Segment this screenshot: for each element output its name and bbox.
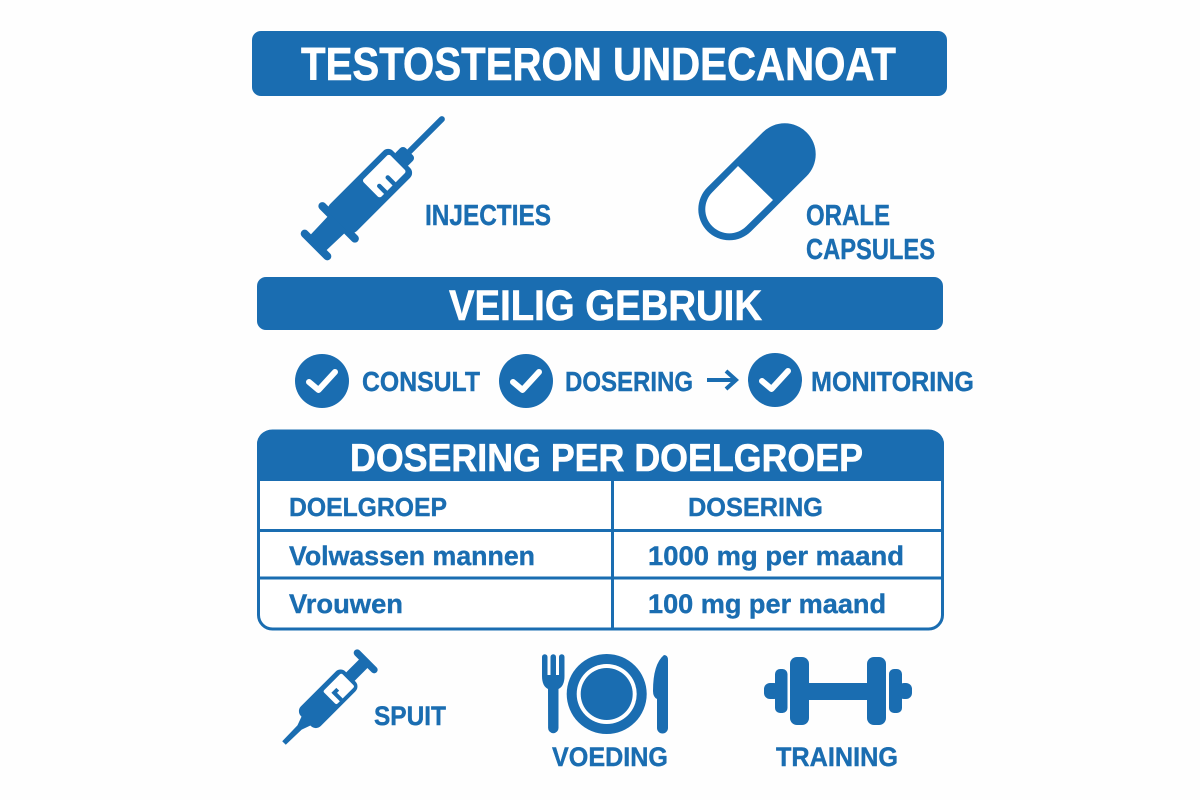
table header: DOSERING PER DOELGROEP	[350, 437, 863, 480]
label: training: TRAINING	[776, 742, 898, 772]
section banner: veilig gebruik: VEILIG GEBRUIK	[449, 282, 762, 330]
step: consult: CONSULT	[362, 366, 480, 397]
plate	[567, 654, 647, 734]
step: consult	[295, 354, 480, 408]
column headers: DOSERING	[688, 492, 823, 522]
dosage table	[257, 430, 944, 629]
section banner: veilig gebruik	[257, 277, 943, 330]
knife	[653, 655, 668, 734]
label: spuit: SPUIT	[374, 701, 446, 731]
icon: capsule	[705, 154, 785, 233]
label: orale capsules: CAPSULES	[806, 234, 935, 266]
row: vrouwen: 100 mg per maand	[648, 589, 886, 619]
label: voeding: VOEDING	[552, 742, 668, 772]
label: orale capsules: ORALE	[806, 200, 890, 232]
row: vrouwen: Vrouwen	[289, 589, 403, 619]
column headers: DOELGROEP	[289, 492, 447, 522]
icon: fork, plate and knife	[542, 654, 668, 734]
column headers	[289, 492, 823, 522]
step: monitoring: MONITORING	[811, 366, 974, 397]
fork	[542, 654, 564, 733]
title banner: TESTOSTERON UNDECANOAT	[301, 38, 896, 90]
row: volwassen mannen	[289, 541, 904, 571]
step: monitoring	[748, 353, 974, 407]
row: volwassen mannen: Volwassen mannen	[289, 541, 535, 571]
label: injecties: INJECTIES	[425, 200, 551, 232]
label: orale capsules	[806, 200, 935, 266]
row: vrouwen	[289, 589, 886, 619]
icon: dumbbell	[764, 657, 912, 725]
step: dosering	[499, 354, 693, 408]
icon: small syringe	[273, 648, 379, 754]
step: dosering: DOSERING	[565, 366, 693, 397]
icon: large syringe	[294, 98, 463, 267]
row: volwassen mannen: 1000 mg per maand	[648, 541, 904, 571]
arrow	[707, 371, 736, 389]
table header	[257, 430, 944, 481]
